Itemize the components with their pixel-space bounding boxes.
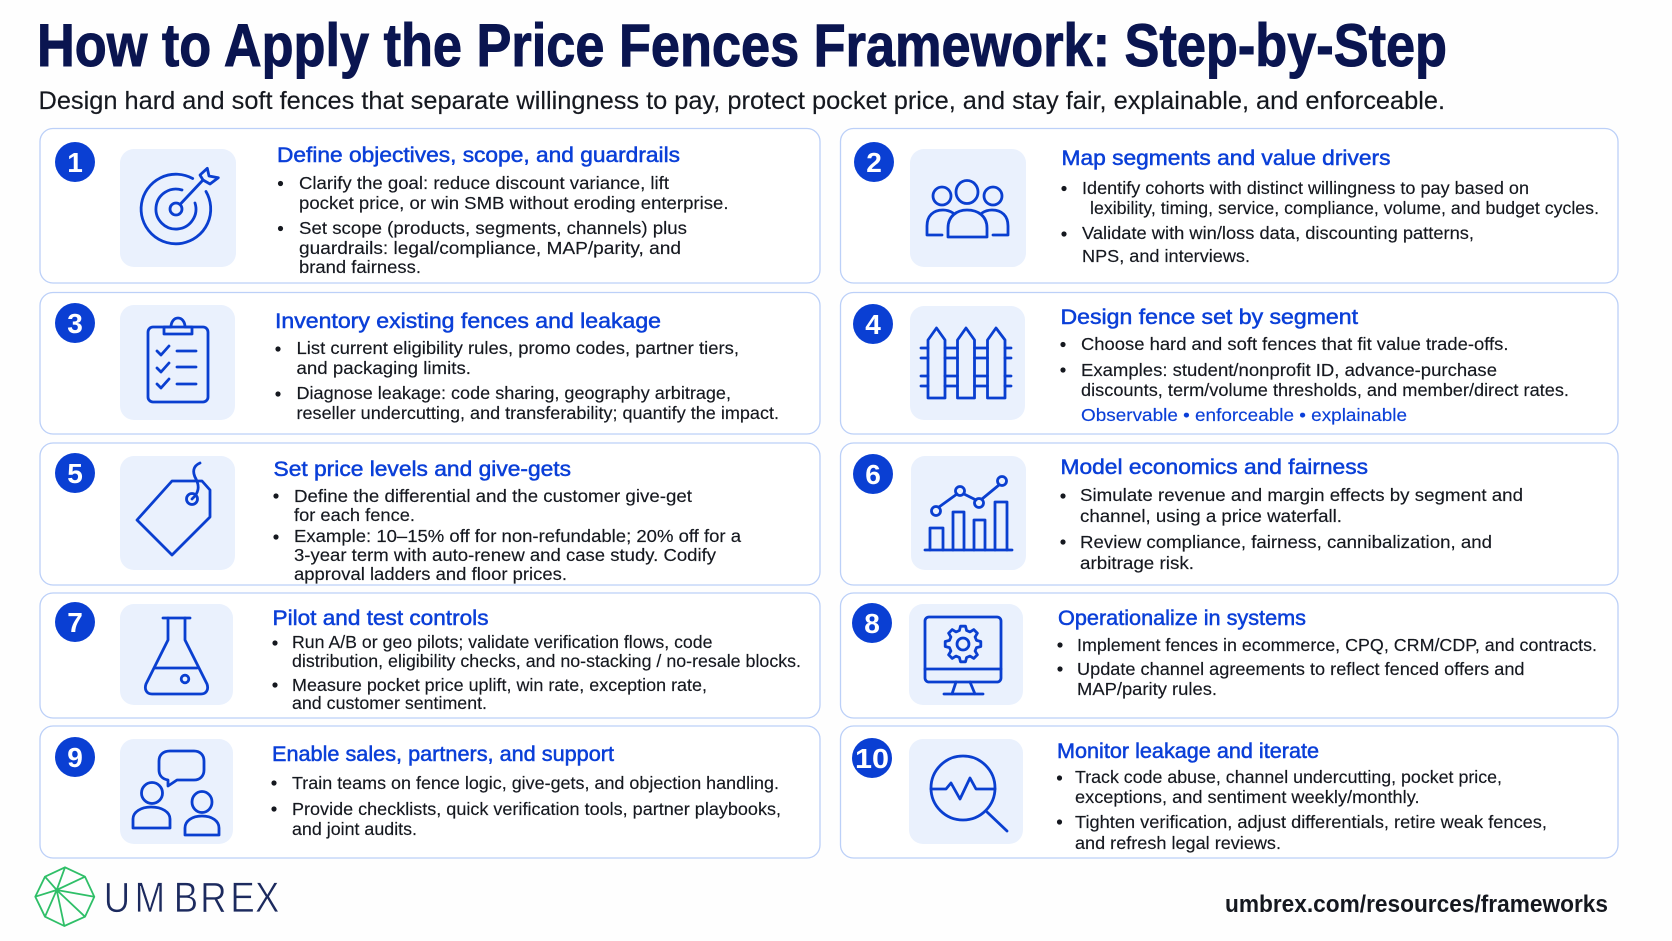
panel: step 4 design fence set bbox=[840, 292, 1618, 434]
bullet list bbox=[272, 632, 801, 713]
bullet list: for each fence. bbox=[294, 505, 415, 525]
number badge 8: 8 bbox=[864, 608, 880, 639]
number badge 5: 5 bbox=[67, 458, 83, 489]
number badge 10 bbox=[852, 738, 892, 778]
wordmark: UMBREX bbox=[104, 874, 279, 922]
number badge 8 bbox=[852, 603, 892, 643]
icon: people with speech bubble bbox=[120, 739, 233, 844]
number badge 1: 1 bbox=[67, 147, 83, 178]
title: How to Apply the Price Fences Framework: Step-by-Step bbox=[37, 12, 1447, 79]
number badge 7: 7 bbox=[67, 607, 83, 638]
icon: group of people bbox=[910, 149, 1026, 267]
bullet list: pocket price, or win SMB without eroding enterprise. bbox=[299, 193, 728, 213]
icon: clipboard checklist bbox=[120, 305, 235, 420]
bullet list: Validate with win/loss data, discounting patterns, bbox=[1082, 223, 1474, 243]
bullet list: MAP/parity rules. bbox=[1077, 679, 1217, 699]
bullet list: and packaging limits. bbox=[296, 358, 471, 378]
bullet list: Provide checklists, quick verification tools, partner playbooks, bbox=[292, 799, 781, 819]
icon: bar and line chart bbox=[911, 456, 1026, 570]
bullet list: approval ladders and floor prices. bbox=[294, 564, 567, 584]
logo: Umbrex bbox=[35, 867, 279, 926]
panel: step 2 map segments bbox=[840, 128, 1618, 283]
bullet list: channel, using a price waterfall. bbox=[1080, 506, 1342, 526]
number badge 9: 9 bbox=[67, 742, 83, 773]
bullet list: and refresh legal reviews. bbox=[1075, 833, 1281, 853]
bullet list: Tighten verification, adjust differentials, retire weak fences, bbox=[1075, 812, 1547, 832]
bullet list bbox=[1057, 767, 1547, 853]
panel: step 1 define objectives bbox=[40, 128, 820, 283]
bullet list: arbitrage risk. bbox=[1080, 553, 1194, 573]
icon: picket fence bbox=[910, 306, 1025, 420]
subtitle: Design hard and soft fences that separate willingness to pay, protect pocket price, and stay fair, explainable, and enforceable. bbox=[38, 87, 1445, 115]
bullet list: Measure pocket price uplift, win rate, exception rate, bbox=[292, 675, 707, 695]
bullet list: Train teams on fence logic, give-gets, and objection handling. bbox=[292, 773, 779, 793]
number badge 3: 3 bbox=[67, 308, 83, 339]
icon: target with arrow bbox=[120, 149, 236, 267]
bullet list: Choose hard and soft fences that fit value trade-offs. bbox=[1081, 334, 1508, 354]
bullet list: exceptions, and sentiment weekly/monthly. bbox=[1075, 787, 1420, 807]
panel: step 8 operationalize bbox=[840, 593, 1618, 718]
bullet list: Clarify the goal: reduce discount variance, lift bbox=[299, 173, 669, 193]
number badge 4: 4 bbox=[865, 309, 881, 340]
bullet list: and customer sentiment. bbox=[292, 693, 487, 713]
bullet list: 3-year term with auto-renew and case study. Codify bbox=[294, 545, 716, 565]
icon: magnifier with pulse bbox=[909, 739, 1023, 844]
bullet list: discounts, term/volume thresholds, and member/direct rates. bbox=[1081, 380, 1569, 400]
panel: step 6 model economics bbox=[840, 443, 1618, 585]
bullet list: distribution, eligibility checks, and no-stacking / no-resale blocks. bbox=[292, 651, 801, 671]
number badge 5 bbox=[55, 453, 95, 493]
number badge 6: 6 bbox=[865, 459, 881, 490]
panel: step 7 pilot bbox=[40, 593, 820, 718]
bullet list: Example: 10–15% off for non-refundable; 20% off for a bbox=[294, 526, 741, 546]
bullet list: Define the differential and the customer give-get bbox=[294, 486, 692, 506]
bullet list: lexibility, timing, service, compliance, volume, and budget cycles. bbox=[1090, 198, 1599, 218]
bullet list: brand fairness. bbox=[299, 257, 421, 277]
bullet list: Identify cohorts with distinct willingness to pay based on bbox=[1082, 178, 1529, 198]
number badge 1 bbox=[55, 142, 95, 182]
heading: Map segments and value drivers bbox=[1062, 147, 1390, 170]
bullet list bbox=[271, 773, 781, 839]
bullet list: Review compliance, fairness, cannibalization, and bbox=[1080, 532, 1492, 552]
bullet list: Run A/B or geo pilots; validate verification flows, code bbox=[292, 632, 712, 652]
number badge 2: 2 bbox=[866, 147, 882, 178]
bullet list: guardrails: legal/compliance, MAP/parity, and bbox=[299, 238, 681, 258]
bullet list: NPS, and interviews. bbox=[1082, 246, 1250, 266]
icon: price tag bbox=[120, 456, 235, 570]
panel: step 10 monitor bbox=[840, 726, 1618, 858]
bullet list: Track code abuse, channel undercutting, pocket price, bbox=[1075, 767, 1502, 787]
bullet list bbox=[1057, 635, 1597, 699]
bullet list: and joint audits. bbox=[292, 819, 417, 839]
bullet list: reseller undercutting, and transferability; quantify the impact. bbox=[296, 403, 779, 423]
bullet list bbox=[275, 338, 779, 423]
bullet list bbox=[1060, 334, 1569, 400]
heading: Operationalize in systems bbox=[1058, 607, 1306, 630]
number badge 6 bbox=[853, 454, 893, 494]
bullet list: Diagnose leakage: code sharing, geography arbitrage, bbox=[296, 383, 731, 403]
heading: Inventory existing fences and leakage bbox=[275, 310, 661, 333]
bullet list: Examples: student/nonprofit ID, advance-purchase bbox=[1081, 360, 1497, 380]
bullet list: List current eligibility rules, promo codes, partner tiers, bbox=[296, 338, 739, 358]
bullet list bbox=[1061, 178, 1599, 266]
footer url: umbrex.com/resources/frameworks bbox=[1225, 891, 1608, 918]
heading: Set price levels and give-gets bbox=[274, 458, 571, 481]
bullet list bbox=[273, 486, 741, 584]
number badge 2 bbox=[854, 142, 894, 182]
icon: lab flask bbox=[120, 604, 233, 705]
panel: step 9 enable sales bbox=[40, 726, 820, 858]
panel: step 3 inventory bbox=[40, 292, 820, 434]
bullet list: Implement fences in ecommerce, CPQ, CRM/CDP, and contracts. bbox=[1077, 635, 1597, 655]
heading: Monitor leakage and iterate bbox=[1057, 740, 1319, 763]
icon: monitor with gear bbox=[909, 604, 1023, 705]
number badge 4 bbox=[853, 304, 893, 344]
heading: Design fence set by segment bbox=[1060, 306, 1358, 329]
panel: step 5 price levels bbox=[40, 443, 820, 585]
heading: Pilot and test controls bbox=[272, 607, 488, 630]
bullet list bbox=[1060, 485, 1523, 573]
number badge 9 bbox=[55, 737, 95, 777]
number badge 3 bbox=[55, 303, 95, 343]
icon: green faceted umbrella mark bbox=[35, 867, 94, 926]
number badge 7 bbox=[55, 602, 95, 642]
bullet list: Simulate revenue and margin effects by segment and bbox=[1080, 485, 1523, 505]
bullet list bbox=[278, 173, 728, 277]
bullet list: Update channel agreements to reflect fenced offers and bbox=[1077, 659, 1524, 679]
heading: Define objectives, scope, and guardrails bbox=[277, 144, 680, 167]
heading: Model economics and fairness bbox=[1060, 456, 1368, 479]
callout: fence criteria: Observable • enforceable • explainable bbox=[1081, 405, 1407, 425]
bullet list: Set scope (products, segments, channels) plus bbox=[299, 218, 687, 238]
heading: Enable sales, partners, and support bbox=[272, 743, 614, 766]
number badge 10: 10 bbox=[855, 743, 889, 774]
